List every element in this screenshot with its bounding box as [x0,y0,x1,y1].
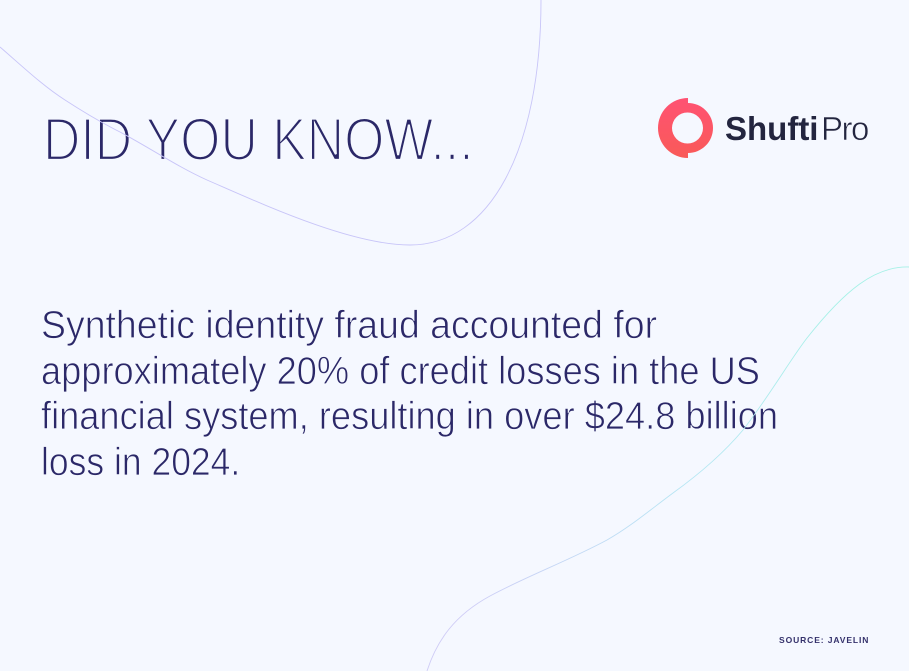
body text: approximately 20% of credit losses in the US [41,350,760,392]
body text [41,304,778,484]
body text: loss in 2024. [41,440,240,484]
icon: red ring [658,98,713,158]
body text: financial system, resulting in over $24.8 billion [41,395,778,438]
logo: Shufti Pro [658,98,868,158]
title: DID YOU KNOW... [43,106,474,173]
wordmark: Shufti: Shufti [725,110,818,146]
wordmark: Pro: Pro [821,110,868,146]
body text: Synthetic identity fraud accounted for [41,304,657,347]
source note: SOURCE: JAVELIN [779,635,869,645]
